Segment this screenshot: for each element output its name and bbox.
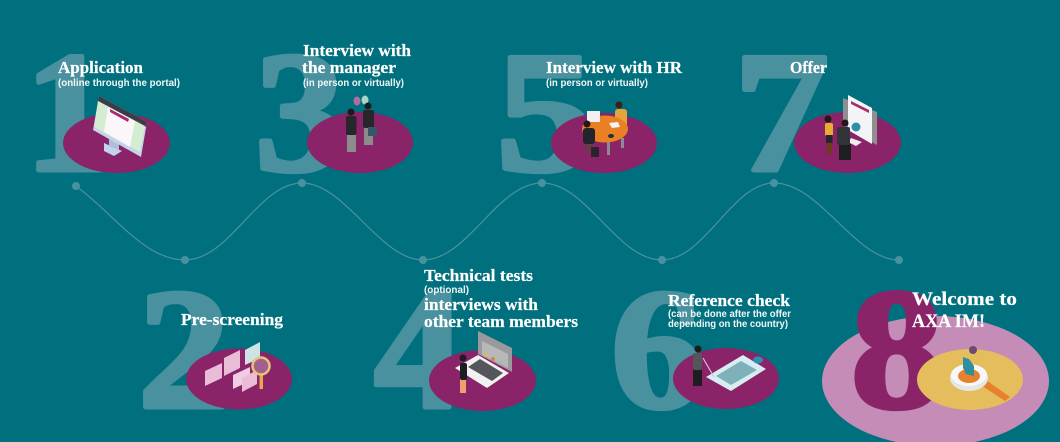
base ellipse 1 bbox=[63, 113, 170, 173]
base ellipse 6 bbox=[673, 348, 779, 409]
numeral 5: 5 bbox=[496, 18, 596, 208]
step 3: interview with the manager bbox=[255, 18, 413, 208]
heading: interviews with other team members: other team members bbox=[424, 312, 578, 331]
inner yellow ellipse bbox=[917, 349, 1023, 410]
heading: interview with the manager: Interview with bbox=[303, 41, 412, 60]
numeral 7: 7 bbox=[734, 18, 829, 208]
numeral 6: 6 bbox=[611, 255, 704, 442]
timeline curve bbox=[72, 179, 903, 264]
icon: CVs and magnifier bbox=[205, 342, 270, 392]
heading: welcome to AXA IM bbox=[912, 289, 1017, 332]
heading: interviews with other team members: interviews with bbox=[424, 295, 539, 314]
step 2: pre-screening bbox=[138, 255, 292, 442]
heading: offer: Offer bbox=[790, 58, 827, 77]
note: online through the portal: (online through the portal) bbox=[58, 78, 180, 89]
icon: handshake and contract bbox=[824, 95, 877, 160]
heading: reference check: Reference check bbox=[668, 291, 791, 310]
heading: welcome to AXA IM: Welcome to bbox=[912, 289, 1017, 310]
base ellipse 7 bbox=[794, 112, 901, 173]
base ellipse 3 bbox=[307, 112, 413, 173]
heading: pre-screening: Pre-screening bbox=[181, 310, 284, 329]
numeral 2: 2 bbox=[138, 255, 230, 442]
note: can be done after the offer: depending on the country) bbox=[668, 319, 788, 330]
note: can be done after the offer bbox=[668, 309, 791, 330]
step 1: application bbox=[25, 18, 180, 208]
base ellipse 5 bbox=[551, 113, 657, 173]
step 7: offer bbox=[734, 18, 901, 208]
icon: chair on a podium with carpet bbox=[950, 346, 1010, 401]
icon: meeting at table bbox=[582, 102, 628, 157]
heading: interview with the manager: the manager bbox=[302, 58, 396, 77]
icon: two people talking bbox=[346, 96, 377, 152]
icon: laptop and person bbox=[455, 331, 512, 393]
outer pink ellipse bbox=[822, 316, 1049, 442]
icon: man and clipboard bbox=[693, 346, 766, 391]
note: in person or virtually: (in person or virtually) bbox=[546, 78, 648, 89]
note: optional: (optional) bbox=[424, 285, 469, 296]
heading: interview with HR: Interview with HR bbox=[546, 58, 683, 77]
base ellipse 4 bbox=[429, 350, 536, 411]
heading: technical tests: Technical tests bbox=[424, 266, 533, 285]
heading: welcome to AXA IM: AXA IM! bbox=[912, 311, 985, 332]
base ellipse 2 bbox=[186, 348, 292, 410]
step 4: technical tests bbox=[374, 255, 578, 442]
step 6: reference check bbox=[611, 255, 791, 442]
numeral 3: 3 bbox=[255, 18, 345, 208]
heading: interviews with other team members bbox=[424, 295, 578, 331]
heading: interview with the manager bbox=[302, 41, 412, 77]
heading: application: Application bbox=[58, 58, 144, 77]
step 5: interview with HR bbox=[496, 18, 683, 208]
numeral 1: 1 bbox=[25, 18, 110, 208]
note: can be done after the offer: (can be done after the offer bbox=[668, 309, 791, 320]
note: in person or virtually: (in person or virtually) bbox=[303, 78, 404, 89]
numeral 8: 8 bbox=[851, 255, 943, 442]
icon: computer monitor bbox=[93, 96, 147, 157]
step 8: welcome bbox=[822, 255, 1049, 442]
numeral 4: 4 bbox=[374, 255, 464, 442]
